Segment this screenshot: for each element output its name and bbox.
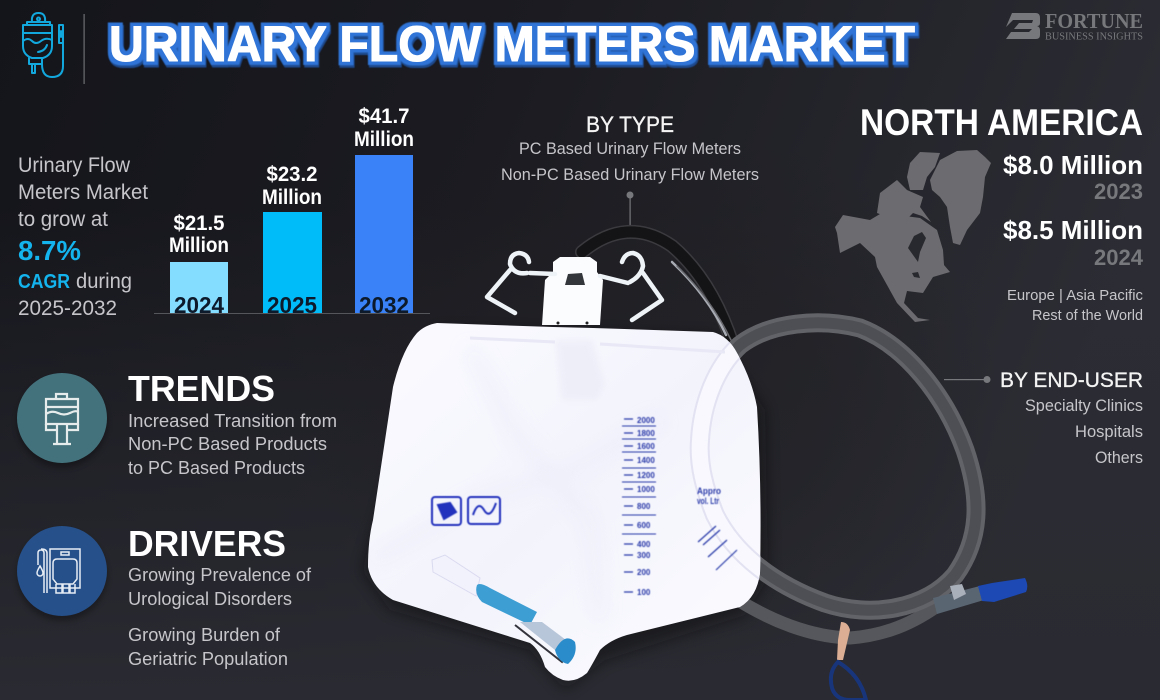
bar 2025 [262, 163, 322, 318]
growth text block: CAGR [18, 271, 70, 293]
bar 2024: $21.5 [174, 212, 225, 235]
panel: drivers: Urological Disorders [128, 588, 292, 609]
drain clip [432, 555, 576, 664]
panel: by type: Non-PC Based Urinary Flow Meters [501, 166, 759, 184]
bag volume scale: 1400 [637, 456, 655, 465]
bag side print: Appro [697, 486, 721, 496]
title: URINARY FLOW METERS MARKET [109, 16, 915, 72]
bag side print: vol. Ltr [697, 496, 719, 506]
growth text block [18, 153, 148, 320]
icon: drivers [17, 526, 107, 621]
bag printed icons [432, 497, 500, 525]
growth text block: 2025-2032 [18, 296, 117, 320]
bag volume scale [622, 416, 656, 597]
bar 2024: Million [169, 234, 229, 257]
urine bag photo illustration [362, 232, 1027, 700]
bar chart [154, 105, 430, 318]
bar 2032: Million [354, 128, 414, 151]
bag volume scale: 1800 [637, 429, 655, 438]
panel: North America: $8.5 Million [1003, 215, 1143, 245]
bar 2025: Million [262, 186, 322, 209]
panel: North America: 2024 [1094, 245, 1144, 270]
growth text block: during [76, 269, 132, 293]
bar 2032 [354, 105, 414, 318]
bar 2025: $23.2 [266, 163, 318, 186]
panel: North America: Europe | Asia Pacific [1007, 287, 1143, 304]
bar 2032: 2032 [359, 292, 409, 318]
panel: trends [17, 368, 337, 478]
panel: trends: Non-PC Based Products [128, 433, 327, 454]
upper tube [582, 232, 733, 345]
panel: drivers: Growing Burden of [128, 624, 281, 645]
main tube loop on dark background [700, 323, 976, 610]
bag side print [697, 486, 737, 570]
logo: Fortune Business Insights: BUSINESS INSIGHTS [1045, 32, 1143, 42]
header icon: urine bag [23, 13, 63, 77]
bag volume scale: 1000 [637, 485, 655, 494]
panel: by end-user: Hospitals [1075, 423, 1143, 441]
growth text block: 8.7% [18, 235, 81, 266]
panel: by type [501, 112, 759, 226]
panel: North America: Rest of the World [1032, 307, 1143, 324]
panel: by end-user [944, 369, 1143, 467]
bag creases [372, 350, 660, 620]
bag volume scale: 300 [637, 551, 651, 560]
panel: trends: TRENDS [128, 368, 275, 409]
bag volume scale: 200 [637, 568, 651, 577]
panel: North America [835, 102, 1144, 324]
panel: drivers: Geriatric Population [128, 648, 288, 669]
bar 2024 [169, 212, 229, 318]
panel: by type: BY TYPE [586, 112, 674, 137]
growth text block: to grow at [18, 207, 108, 231]
bag top seam [470, 338, 725, 352]
growth text block: Meters Market [18, 180, 148, 204]
panel: drivers [17, 523, 312, 669]
panel: by end-user: Others [1095, 449, 1143, 467]
bag volume scale: 400 [637, 540, 651, 549]
map: North America [835, 150, 991, 322]
bag volume scale: 1600 [637, 442, 655, 451]
panel: North America: 2023 [1094, 179, 1143, 204]
bag volume scale: 800 [637, 502, 651, 511]
bag volume scale: 100 [637, 588, 651, 597]
panel: by end-user: BY END-USER [1000, 369, 1143, 392]
bar 2024: 2024 [174, 292, 224, 318]
logo: Fortune Business Insights [1006, 9, 1143, 42]
panel: by end-user: Specialty Clinics [1025, 397, 1143, 415]
bag shadow [362, 330, 768, 690]
header divider [84, 14, 85, 84]
logo: Fortune Business Insights: FORTUNE [1045, 9, 1143, 33]
bag volume scale: 2000 [637, 416, 655, 425]
bar 2025: 2025 [267, 292, 317, 318]
bag volume scale: 1200 [637, 471, 655, 480]
panel: trends: Increased Transition from [128, 410, 337, 431]
blue connector [933, 578, 1027, 614]
bag volume scale: 600 [637, 521, 651, 530]
bar 2032: $41.7 [358, 105, 410, 128]
panel: North America: $8.0 Million [1003, 150, 1143, 180]
bag body [368, 323, 761, 681]
clasp and blue ring [831, 622, 866, 700]
panel: trends: to PC Based Products [128, 457, 305, 478]
panel: drivers: DRIVERS [128, 523, 286, 564]
panel: drivers: Growing Prevalence of [128, 564, 312, 585]
panel: by type: PC Based Urinary Flow Meters [519, 140, 741, 158]
icon: trends [17, 373, 107, 468]
growth text block: Urinary Flow [18, 153, 130, 177]
lower tube [738, 598, 948, 638]
bag hanger [487, 253, 662, 400]
tube loop seen through bag [690, 342, 760, 580]
